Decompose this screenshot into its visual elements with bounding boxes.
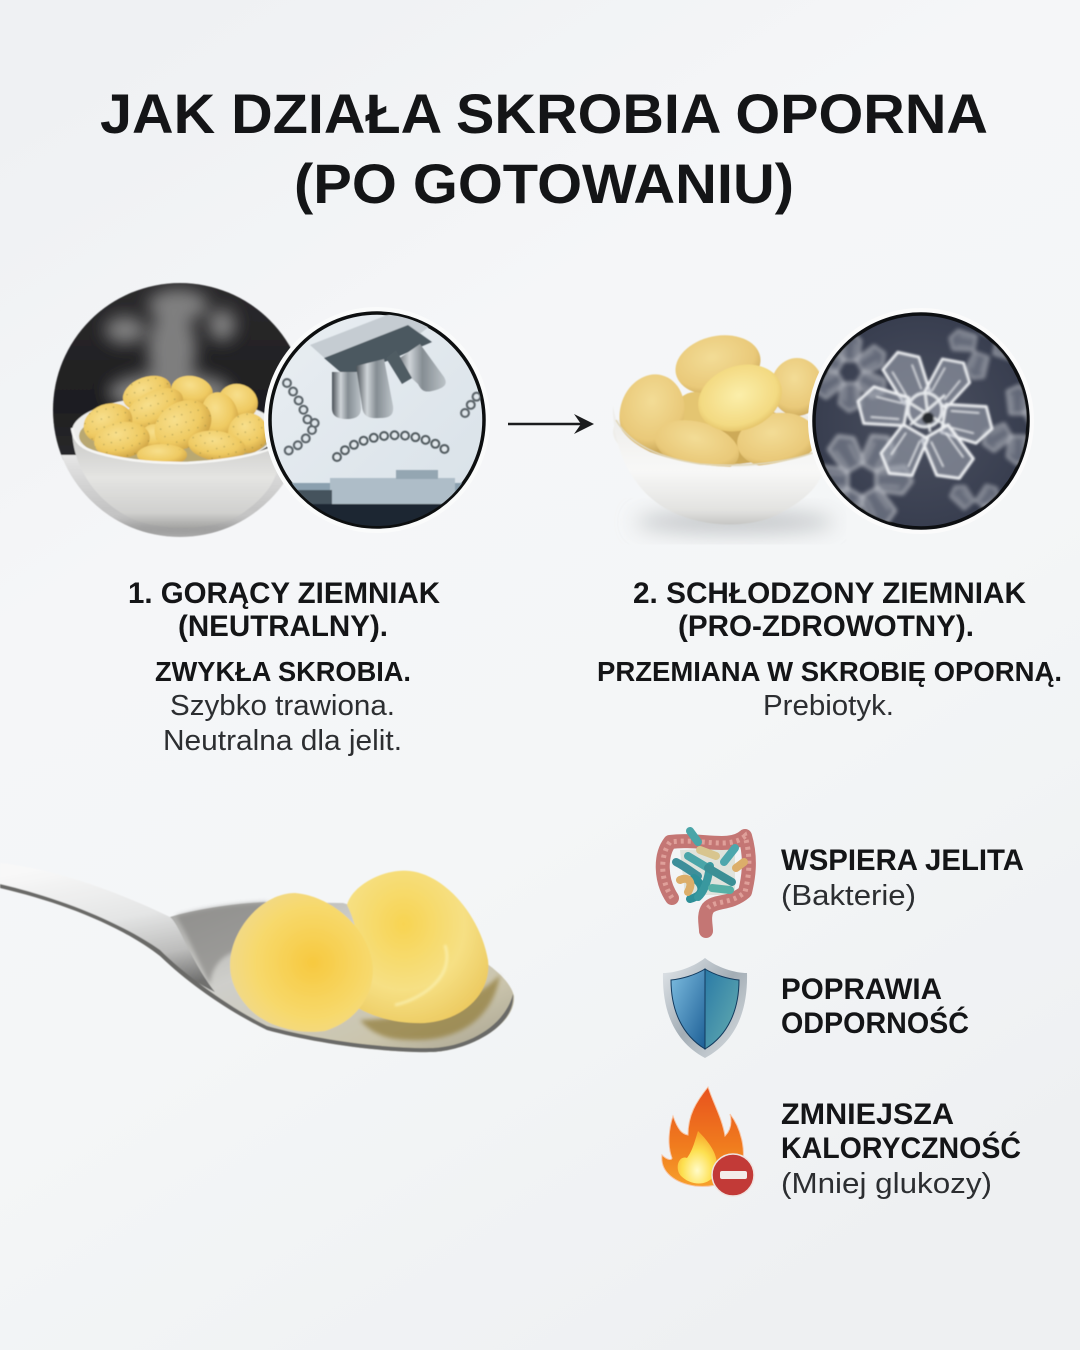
text: supports gut — [781, 844, 1024, 912]
subheading: step 1: ZWYKŁA SKROBIA. — [155, 656, 411, 687]
benefit: supports gut — [663, 831, 1024, 931]
subheading: step 2: PRZEMIANA W SKROBIĘ OPORNĄ. — [597, 656, 1062, 687]
heading: step 2 — [633, 577, 1026, 643]
description: step 1: Szybko trawiona. — [170, 690, 395, 722]
text block: step 2 — [597, 577, 1062, 722]
heading: step 1: (NEUTRALNY). — [178, 610, 388, 643]
description: step 1 — [163, 690, 402, 757]
benefit: immunity — [663, 958, 969, 1058]
panel: benefits — [662, 831, 1024, 1200]
panel: cold potato illustration — [611, 308, 1058, 534]
heading: step 1: 1. GORĄCY ZIEMNIAK — [128, 577, 440, 610]
text block: step 1 — [128, 577, 440, 757]
photo: steaming bowl of hot potatoes — [52, 282, 291, 538]
description: step 1: Neutralna dla jelit. — [163, 725, 402, 757]
photo: spoon with potato — [0, 863, 514, 1052]
text: supports gut: (Bakterie) — [781, 880, 916, 912]
heading: step 1 — [128, 577, 440, 643]
text: supports gut: WSPIERA JELITA — [781, 844, 1024, 877]
panel: hot potato illustration — [50, 280, 490, 545]
text: fewer calories: ZMNIEJSZA — [781, 1098, 954, 1131]
icon: shield — [663, 958, 747, 1058]
photo: resistant starch crystals — [808, 312, 1030, 530]
icon: intestines — [663, 831, 749, 931]
text: immunity — [781, 973, 969, 1040]
arrow — [508, 414, 594, 434]
title: JAK DZIAŁA SKROBIA OPORNA — [100, 82, 988, 145]
heading: step 2: (PRO-ZDROWOTNY). — [678, 610, 974, 643]
photo: microscope and starch chains — [264, 307, 490, 536]
icon: flame with minus — [662, 1087, 754, 1196]
text: immunity: ODPORNOŚĆ — [781, 1006, 969, 1040]
photo: bowl of chilled potatoes — [611, 328, 835, 534]
title: (PO GOTOWANIU) — [294, 152, 794, 215]
benefit: fewer calories — [662, 1087, 1021, 1200]
text: fewer calories — [781, 1098, 1021, 1200]
title — [100, 82, 988, 215]
text: fewer calories: KALORYCZNOŚĆ — [781, 1131, 1021, 1165]
text: fewer calories: (Mniej glukozy) — [781, 1168, 992, 1200]
text: immunity: POPRAWIA — [781, 973, 942, 1006]
description: step 2: Prebiotyk. — [763, 690, 894, 722]
heading: step 2: 2. SCHŁODZONY ZIEMNIAK — [633, 577, 1026, 610]
